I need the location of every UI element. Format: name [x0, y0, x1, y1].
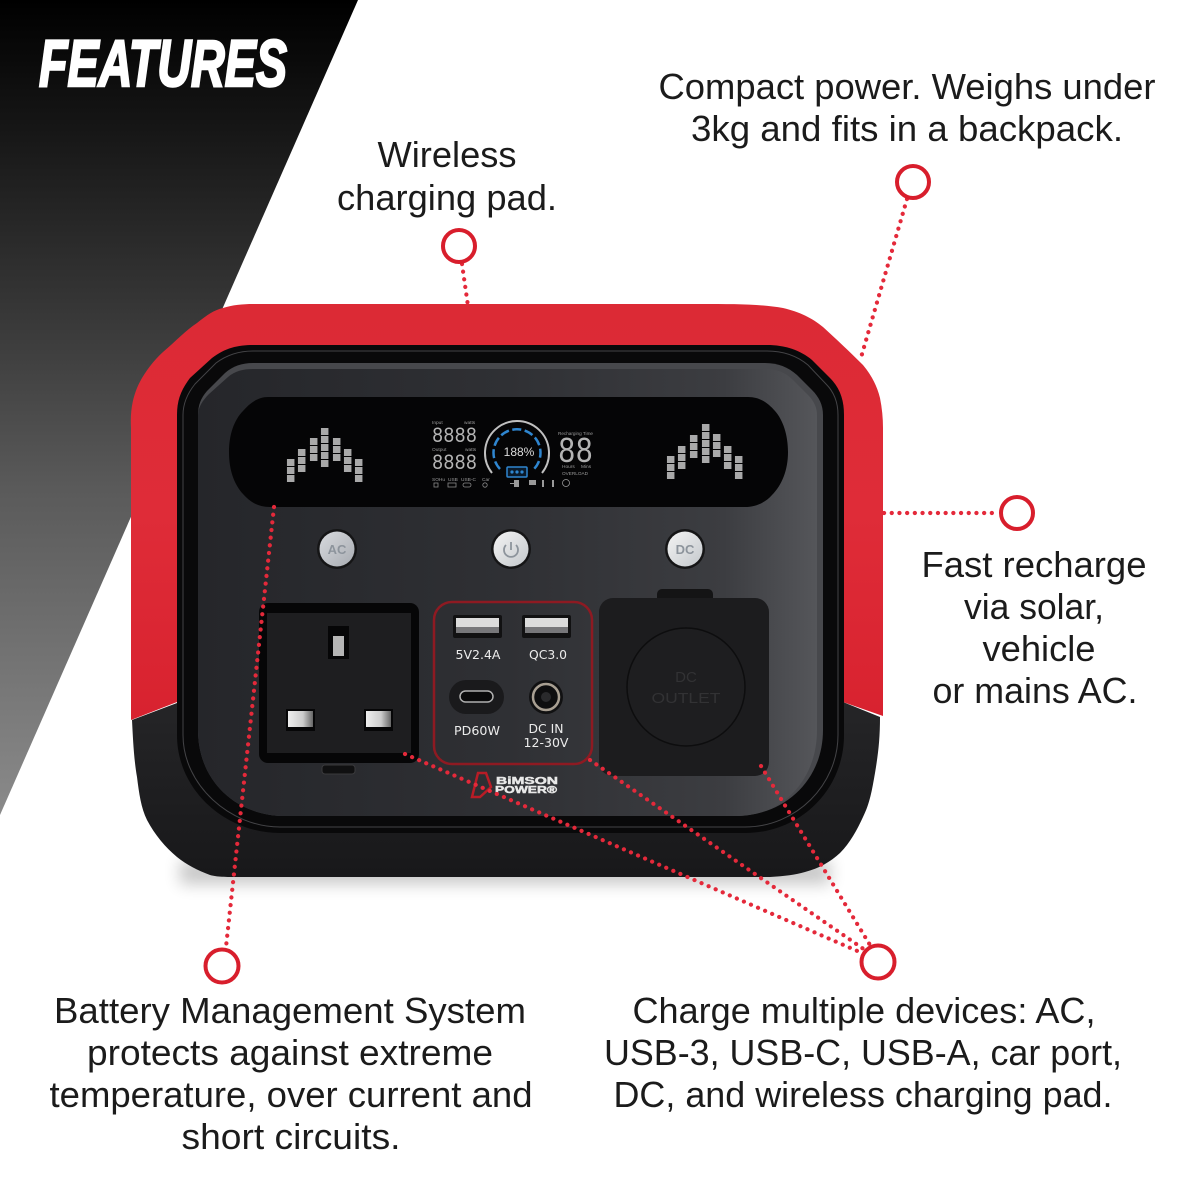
pointer: compact power — [860, 166, 929, 361]
AC socket — [259, 603, 419, 774]
port: USB-A QC3.0: QC3.0 — [529, 648, 567, 662]
banner: diagonal gradient background — [0, 0, 358, 815]
callout: battery management system: Battery Management System — [54, 990, 526, 1031]
display: recharge time readout: Recharging Time — [558, 431, 593, 437]
button: AC: AC — [328, 542, 347, 557]
port: USB-A QC3.0 — [522, 615, 571, 662]
display: input and output readouts: Car — [482, 477, 490, 483]
DC outlet cover: OUTLET — [652, 690, 720, 707]
display: input and output readouts: USB-C — [461, 477, 476, 483]
pointer: wireless charging pad — [443, 230, 475, 306]
display: status icons — [510, 480, 570, 487]
display: recharge time readout: Mins — [581, 464, 592, 470]
port: USB-A 5V2.4A — [453, 615, 502, 662]
port: USB-A 5V2.4A: 5V2.4A — [456, 648, 501, 662]
callout: fast recharge: vehicle — [982, 628, 1096, 669]
display: battery gauge — [485, 421, 549, 477]
title: FEATURES — [39, 26, 287, 100]
callout: charge multiple devices: USB-3, USB-C, USB-A, car port, — [604, 1032, 1122, 1073]
pointer: fast recharge — [884, 497, 1033, 529]
DC outlet cover — [599, 589, 769, 776]
front panel — [198, 363, 823, 816]
port: DC in: 12-30V — [524, 736, 569, 750]
callout: wireless charging pad — [337, 134, 557, 218]
callout: compact power: 3kg and fits in a backpack. — [691, 108, 1123, 149]
callout: compact power — [658, 66, 1156, 149]
display: input and output readouts: 8888 — [432, 424, 477, 449]
display: input and output readouts: Input — [432, 420, 443, 426]
port: DC in — [524, 680, 569, 750]
display: recharge time readout: 88 — [558, 432, 593, 473]
callout: battery management system: temperature, over current and — [50, 1074, 532, 1115]
front frame — [177, 345, 844, 833]
callout: wireless charging pad: Wireless — [378, 134, 516, 175]
port: USB-C PD60W — [449, 680, 504, 738]
button: AC — [317, 529, 357, 569]
display: recharge time readout: Hours — [562, 464, 575, 470]
callout: battery management system — [50, 990, 532, 1157]
callout: battery management system: short circuits. — [182, 1116, 400, 1157]
callout: charge multiple devices — [604, 990, 1122, 1115]
brand logo: BiMSON — [496, 775, 558, 787]
pointer: battery management system — [206, 507, 274, 982]
port: USB-C PD60W: PD60W — [454, 724, 500, 738]
callout: battery management system: protects against extreme — [87, 1032, 493, 1073]
callout: fast recharge: via solar, — [964, 586, 1104, 627]
brand logo — [472, 773, 558, 797]
display: input and output readouts: 8888 — [432, 451, 477, 476]
display screen — [229, 397, 788, 507]
display: battery gauge: 188% — [504, 445, 535, 459]
callout: fast recharge: or mains AC. — [932, 670, 1138, 711]
product: portable power station — [131, 304, 883, 884]
display: input and output readouts: watts — [465, 447, 477, 453]
device body: black base — [132, 702, 880, 877]
display: right level bars — [671, 424, 739, 480]
device body: red shell — [131, 304, 883, 720]
callout: charge multiple devices: DC, and wireless charging pad. — [614, 1074, 1112, 1115]
display: input and output readouts: watts — [464, 420, 476, 426]
display: input and output readouts: USB — [448, 477, 458, 483]
pointer: charge multiple devices — [405, 754, 894, 978]
port: DC in: DC IN — [528, 722, 564, 736]
display: input and output readouts: SOHu — [432, 477, 445, 483]
display: input and output readouts: Output — [432, 447, 447, 453]
callout: compact power: Compact power. Weighs under — [658, 66, 1156, 107]
callout: wireless charging pad: charging pad. — [337, 177, 557, 218]
brand logo: POWER® — [495, 784, 557, 796]
button: power — [491, 529, 531, 569]
callout: charge multiple devices: Charge multiple devices: AC, — [632, 990, 1096, 1031]
button: DC: DC — [676, 542, 695, 557]
USB and DC port group — [434, 602, 592, 764]
callout: fast recharge — [922, 544, 1146, 711]
callout: fast recharge: Fast recharge — [922, 544, 1146, 585]
display: recharge time readout: OVERLOAD — [562, 471, 589, 477]
DC outlet cover: DC — [675, 669, 697, 686]
display: input and output readouts — [432, 420, 490, 487]
button: DC — [665, 529, 705, 569]
display: left level bars — [291, 428, 359, 483]
